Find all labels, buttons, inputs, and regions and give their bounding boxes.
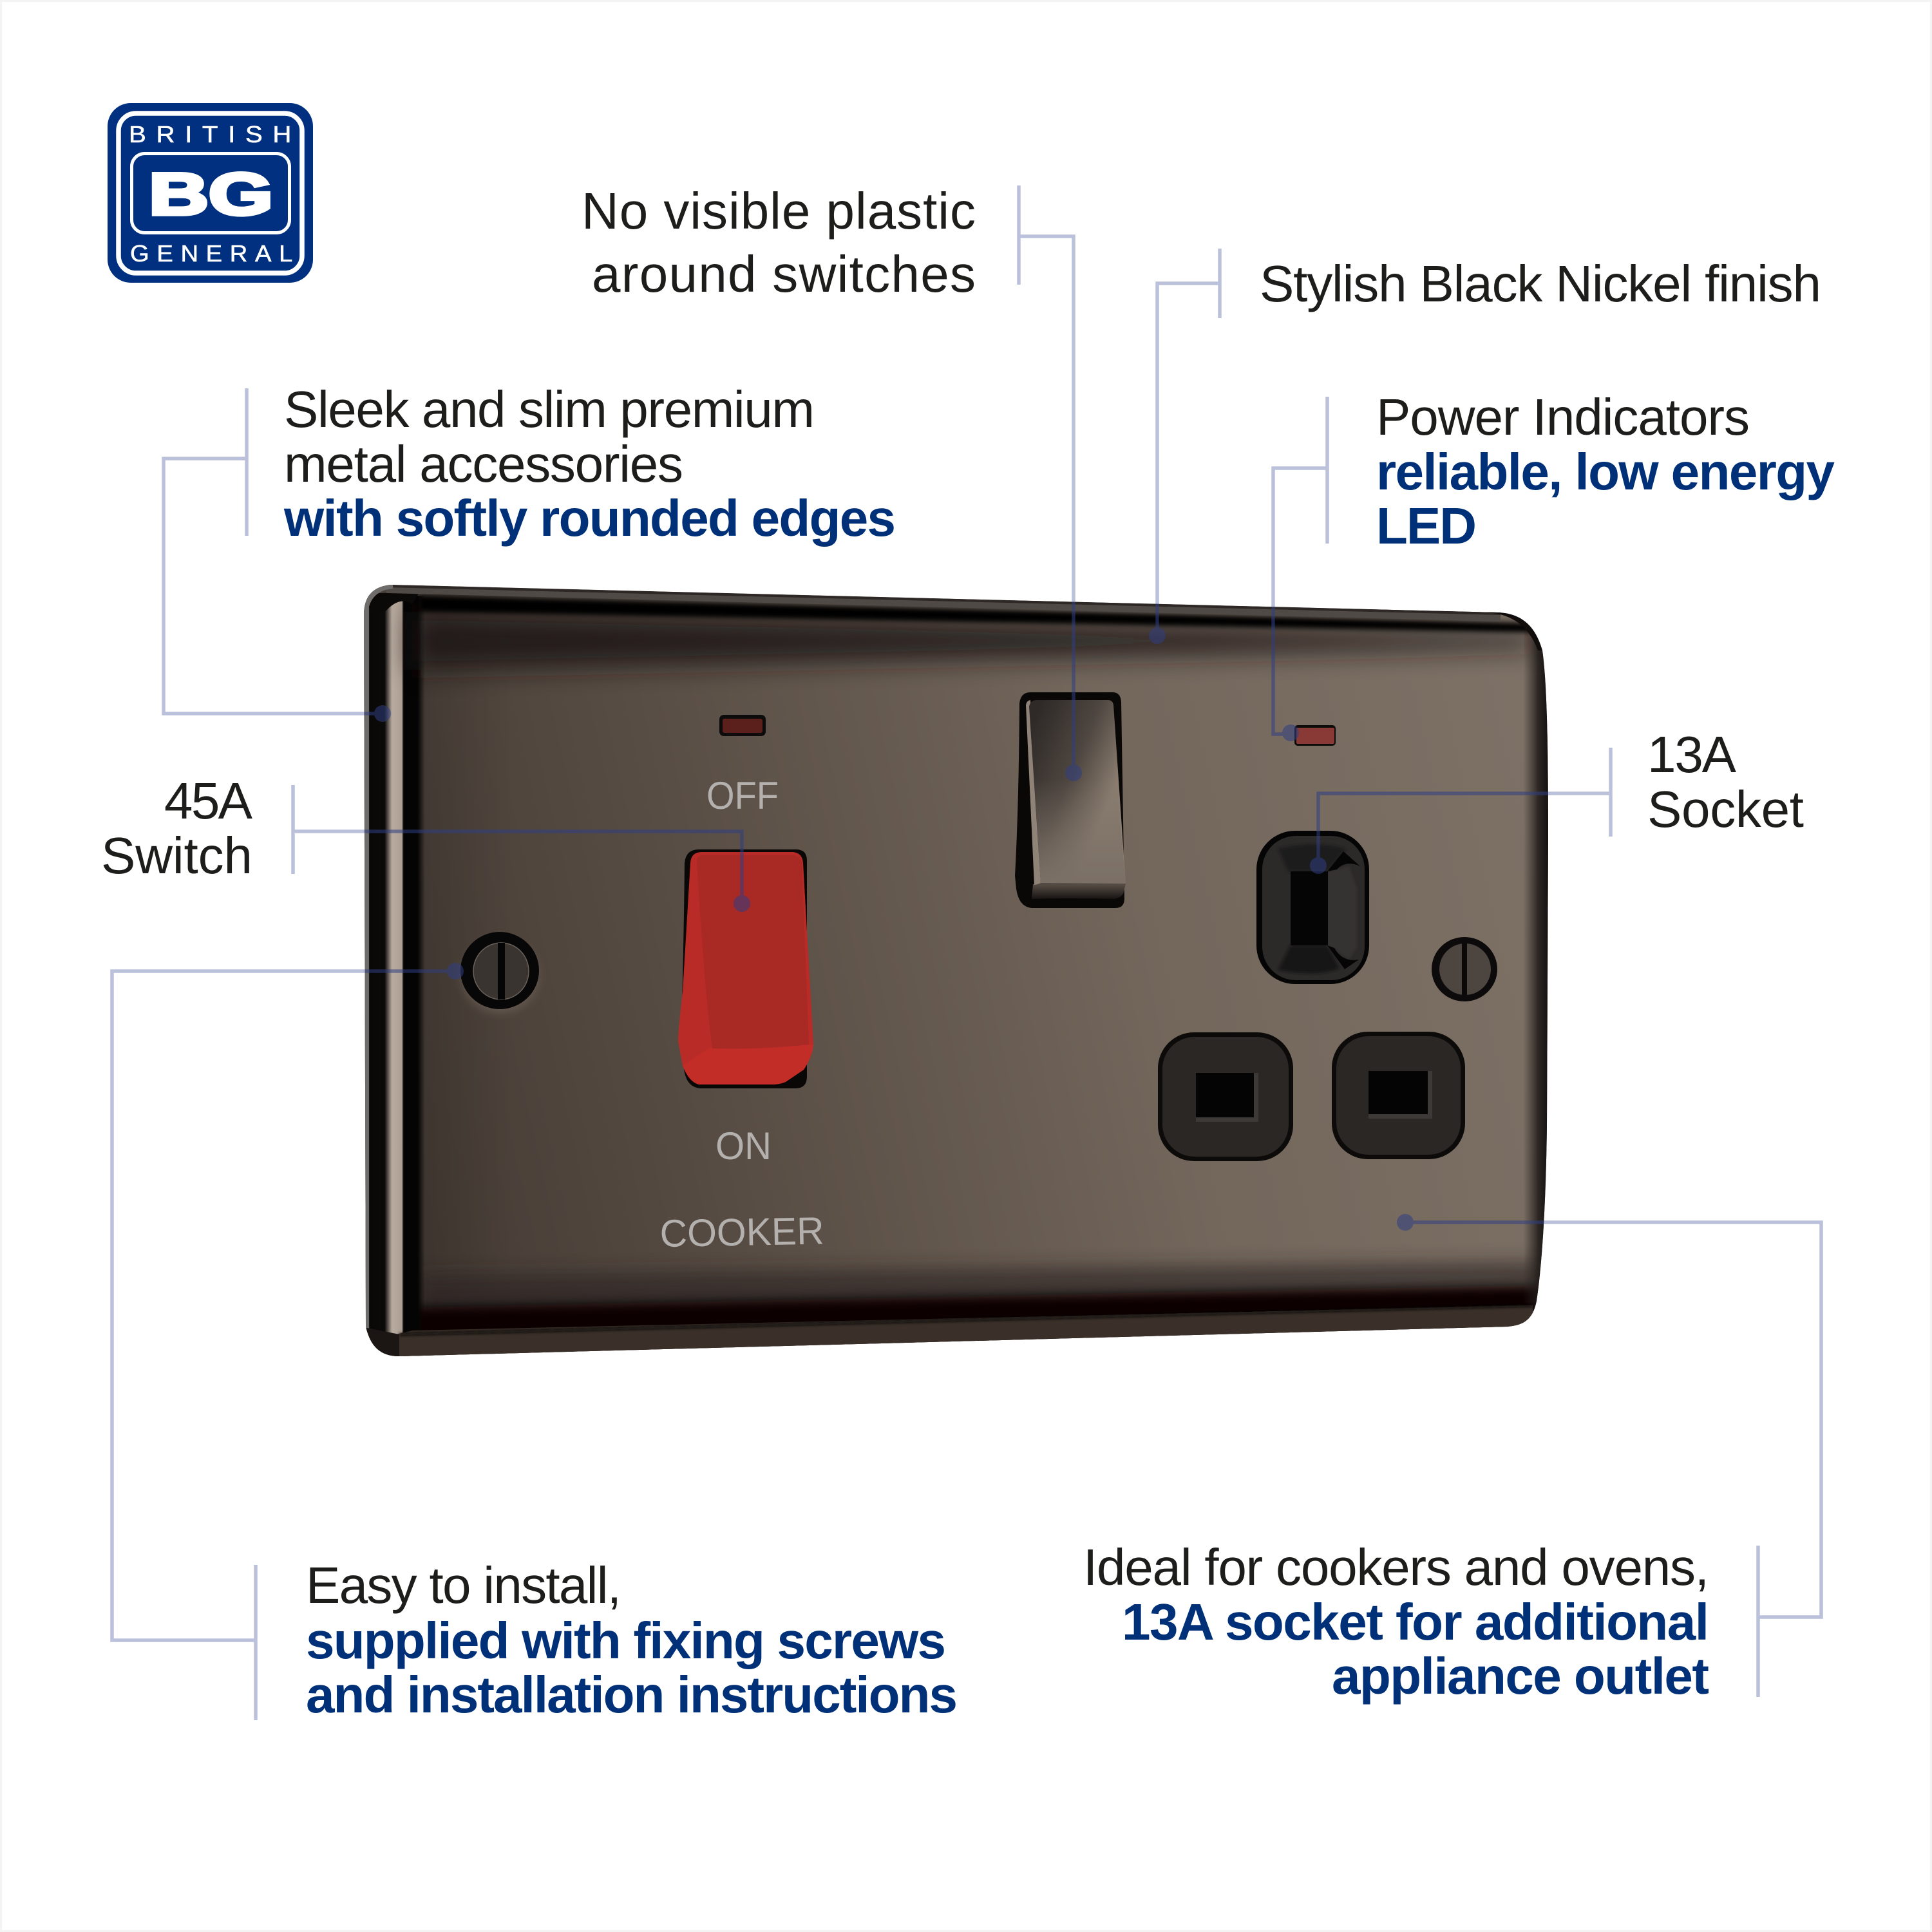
- callout lines and dots over the plate: [364, 601, 1548, 1231]
- text: sleek and slim: [283, 381, 896, 547]
- logo: British General: GENERAL: [130, 240, 300, 267]
- text: black nickel finish: Stylish Black Nickel finish: [1260, 255, 1821, 312]
- red rocker lip: [683, 1045, 813, 1084]
- text: sleek and slim: with softly rounded edges: [283, 489, 896, 547]
- label: COOKER: COOKER: [659, 1209, 824, 1255]
- earth pin socket: [1256, 831, 1369, 984]
- text: 13A socket: 13A: [1647, 726, 1737, 783]
- text: easy to install: and installation instructions: [306, 1666, 958, 1723]
- label: OFF: OFF: [706, 774, 779, 817]
- logo: British General: BG: [149, 162, 273, 227]
- text: sleek and slim: metal accessories: [284, 435, 683, 493]
- text: 45A switch: [101, 772, 253, 884]
- 13A socket switch: black nickel rocker: [1015, 692, 1126, 908]
- left pin socket: [1158, 1032, 1293, 1161]
- gloss reflections: [1327, 851, 1360, 969]
- right pin socket: [1332, 1032, 1465, 1159]
- LED: 45A switch indicator: [719, 715, 766, 736]
- text: easy to install: [306, 1557, 958, 1723]
- right fixing screw: [1432, 937, 1497, 1001]
- rocker recess: [1015, 692, 1124, 908]
- text: easy to install: supplied with fixing screws: [306, 1612, 946, 1669]
- left fixing screw: [460, 932, 539, 1012]
- wall plate: black nickel: [361, 580, 1553, 1365]
- right pin hole: [1368, 1071, 1428, 1114]
- text: ideal for cookers: [1083, 1539, 1709, 1705]
- bottom panel: [1278, 945, 1340, 974]
- text: power indicators: reliable, low energy: [1376, 443, 1835, 500]
- text: no visible plastic: [582, 182, 976, 303]
- text: power indicators: Power Indicators: [1376, 388, 1750, 446]
- text: power indicators: LED: [1376, 497, 1477, 554]
- text: power indicators: [1376, 388, 1835, 554]
- text: 13A socket: [1647, 726, 1804, 838]
- callout lines outside the plate: [112, 185, 1821, 1720]
- text: 45A switch: 45A: [164, 772, 253, 829]
- text: ideal for cookers: appliance outlet: [1332, 1647, 1709, 1705]
- text: sleek and slim: Sleek and slim premium: [284, 381, 815, 438]
- rocker face: [1029, 700, 1126, 884]
- earth pin hole: [1291, 871, 1328, 945]
- 45A red rocker switch: [678, 849, 813, 1088]
- switch recess: [681, 849, 807, 1088]
- left pin hole: [1196, 1073, 1254, 1117]
- red rocker face: [697, 855, 809, 1048]
- red rocker body: [678, 852, 813, 1084]
- top panel: [1278, 844, 1346, 871]
- text: no visible plastic: No visible plastic: [582, 182, 976, 240]
- right panel: [1327, 866, 1357, 960]
- plate body: [361, 580, 1553, 1365]
- logo: British General: BRITISH: [129, 121, 301, 147]
- text: ideal for cookers: 13A socket for additional: [1122, 1593, 1709, 1651]
- text: no visible plastic: around switches: [592, 245, 976, 303]
- text: ideal for cookers: Ideal for cookers and ovens,: [1083, 1539, 1709, 1596]
- rocker side highlight: [1026, 700, 1041, 885]
- rocker lip: [1032, 884, 1126, 899]
- text: 13A socket: Socket: [1647, 781, 1804, 838]
- label: ON: ON: [715, 1124, 772, 1168]
- LED: 13A socket indicator: [1294, 725, 1336, 746]
- logo: British General: [108, 103, 313, 283]
- text: easy to install: Easy to install,: [306, 1557, 621, 1614]
- text: 45A switch: Switch: [101, 827, 252, 884]
